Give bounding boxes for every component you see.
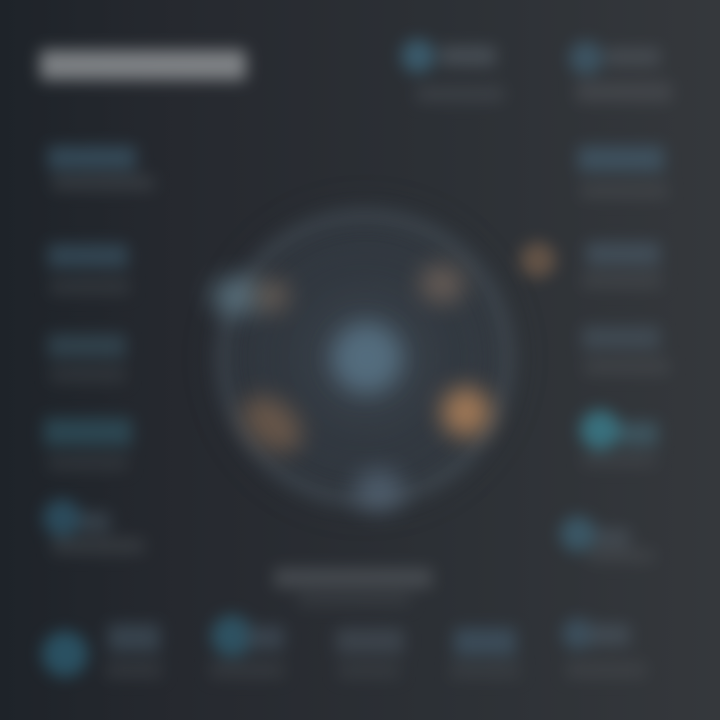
right column item 4 xyxy=(580,410,658,466)
node: bottom blue xyxy=(354,469,404,511)
bottom item 4 xyxy=(450,628,520,678)
left column item 3 xyxy=(48,334,126,382)
left column item 1 xyxy=(48,146,154,190)
ring: outer xyxy=(223,216,507,500)
central radial diagram xyxy=(200,193,556,523)
center hub xyxy=(331,322,403,394)
node: left blue xyxy=(210,276,262,316)
node: left orange xyxy=(254,279,290,313)
bottom item 3 xyxy=(336,628,404,678)
node: outer orange xyxy=(520,242,556,278)
caption under diagram xyxy=(274,568,432,606)
right column item 1 xyxy=(578,146,668,198)
right column item 5 xyxy=(560,516,654,562)
top feature: center right xyxy=(401,39,504,102)
left column item 2 xyxy=(48,244,130,294)
right column item 3 xyxy=(582,326,670,374)
title xyxy=(40,50,246,80)
ring: inner xyxy=(273,266,457,450)
right column item 2 xyxy=(582,242,662,288)
node: lower right orange xyxy=(441,387,491,437)
bottom item 2 xyxy=(210,615,284,678)
node: upper right orange xyxy=(419,264,465,304)
left column item 5 xyxy=(43,499,144,554)
outer disc xyxy=(200,193,530,523)
bottom item 5 xyxy=(562,618,646,678)
node: lower left orange xyxy=(231,385,313,463)
left column item 4 xyxy=(44,418,132,470)
bottom item 1 xyxy=(42,624,162,678)
top feature: far right xyxy=(569,41,672,102)
